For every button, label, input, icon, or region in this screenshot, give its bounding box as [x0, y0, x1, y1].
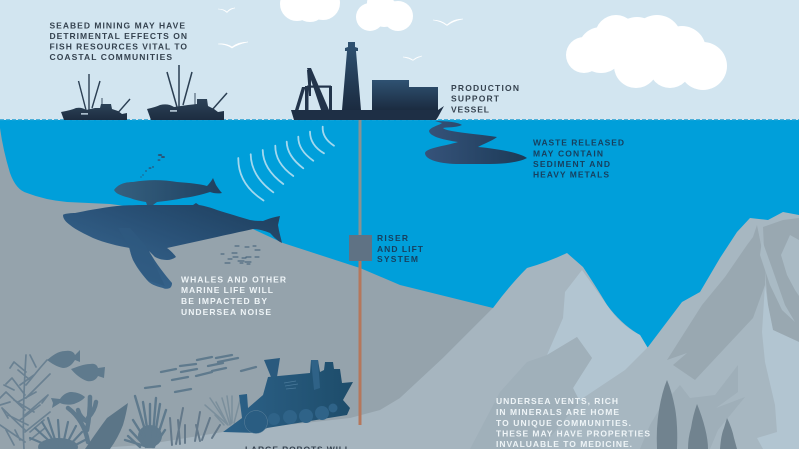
- seaweed: pale fan: [205, 396, 240, 425]
- fish 1: [47, 350, 80, 368]
- caption: undersea vents: IN MINERALS ARE HOME: [496, 407, 619, 417]
- fishing boat 1: [61, 74, 130, 120]
- caption: undersea vents: [496, 396, 650, 449]
- caption: waste: WASTE RELEASED: [533, 138, 624, 148]
- caption: fish resources: [50, 20, 187, 62]
- bird 1: [218, 8, 235, 12]
- caption: production support vessel: PRODUCTION: [451, 83, 519, 93]
- crane: [295, 68, 332, 110]
- caption: production support vessel: [451, 83, 519, 114]
- riser upper: [358, 120, 362, 236]
- riser lower: [358, 260, 362, 425]
- robot miner: [223, 358, 353, 434]
- seabed slope: [0, 128, 520, 449]
- mountain 2: [540, 212, 799, 449]
- caption: whales: MARINE LIFE WILL: [181, 285, 273, 295]
- mountain 2 dark face: [667, 225, 765, 380]
- mountain 2 lit lower face: [757, 285, 799, 449]
- caption: riser and lift system: [377, 233, 424, 264]
- seaweed: centre clump: [125, 396, 166, 447]
- caption: riser and lift system: AND LIFT: [377, 244, 424, 254]
- caption: undersea vents: THESE MAY HAVE PROPERTIES: [496, 428, 650, 438]
- robot vents: [284, 381, 298, 389]
- big whale: [63, 203, 282, 289]
- sea surface waves: [0, 119, 799, 121]
- foreground seabed: [83, 308, 560, 449]
- tree 3: [720, 418, 737, 449]
- caption: riser and lift system: SYSTEM: [377, 254, 418, 264]
- whale flipper highlight: [118, 228, 165, 286]
- mountain 2 snow streak: [760, 240, 795, 322]
- caption: waste: HEAVY METALS: [533, 170, 609, 180]
- caption: whales: BE IMPACTED BY: [181, 296, 267, 306]
- caption: production support vessel: SUPPORT: [451, 94, 500, 104]
- mountain 2 ridge streak: [781, 235, 799, 296]
- bird 4: [403, 56, 422, 60]
- fish school near whale: [221, 246, 260, 264]
- oil plume: [425, 121, 527, 164]
- robot chimney shading: [311, 360, 320, 390]
- robot treads: [268, 404, 338, 425]
- tree 1: [657, 380, 677, 449]
- cargo block: [372, 80, 438, 110]
- caption: waste: SEDIMENT AND: [533, 159, 610, 169]
- robot front wheel: [244, 410, 268, 434]
- lift system box: [349, 235, 372, 261]
- fish 3: [51, 392, 85, 408]
- bird 2: [218, 42, 248, 48]
- ray silhouette: [85, 403, 128, 449]
- caption: fish resources: DETRIMENTAL EFFECTS ON: [50, 31, 187, 41]
- caption: undersea vents: TO UNIQUE COMMUNITIES.: [496, 418, 631, 428]
- cloud: right: [566, 15, 727, 90]
- sky: [0, 0, 799, 120]
- mountain 2 lower shadow: [640, 365, 745, 449]
- caption: riser and lift system: RISER: [377, 233, 408, 243]
- caption: waste: MAY CONTAIN: [533, 148, 603, 158]
- hull: [291, 106, 444, 120]
- caption: waste: [533, 138, 624, 180]
- tree 2: [688, 404, 708, 449]
- cloud: top left: [280, 0, 340, 22]
- cloud: top centre: [356, 0, 413, 31]
- small whale: [114, 178, 222, 208]
- tower: [342, 42, 361, 110]
- bird 3: [433, 19, 463, 26]
- caption: undersea vents: INVALUABLE TO MEDICINE.: [496, 439, 632, 449]
- fish school seabed: [145, 355, 256, 392]
- seaweed: spiky bush: [30, 418, 85, 449]
- caption: fish resources: FISH RESOURCES VITAL TO: [50, 42, 187, 52]
- mountain 2 upper dark ridge: [763, 218, 799, 342]
- fishing boat 2: [147, 65, 227, 120]
- caption: fish resources: COASTAL COMMUNITIES: [50, 52, 172, 62]
- caption: whales: UNDERSEA NOISE: [181, 307, 271, 317]
- production support vessel: [291, 42, 444, 120]
- caption: fish resources: SEABED MINING MAY HAVE: [50, 20, 185, 30]
- ocean: [0, 120, 799, 449]
- mountain 1 lit face: [547, 270, 649, 402]
- caption: production support vessel: VESSEL: [451, 104, 489, 114]
- caption: whales: WHALES AND OTHER: [181, 275, 286, 285]
- mountain 1 lower shadow: [470, 337, 592, 449]
- seaweed: reeds: [170, 408, 220, 445]
- fish 2: [71, 364, 105, 381]
- robot body: [223, 360, 353, 433]
- robot funnel: [264, 358, 280, 377]
- mountain 1: [400, 253, 660, 449]
- coral: branching tree left: [0, 355, 50, 449]
- caption: whales: [181, 275, 286, 317]
- caption: undersea vents: UNDERSEA VENTS, RICH: [496, 396, 618, 406]
- coral: finger coral: [68, 397, 96, 442]
- small fish trail above whale: [140, 154, 165, 178]
- sonar noise arcs: [238, 127, 334, 200]
